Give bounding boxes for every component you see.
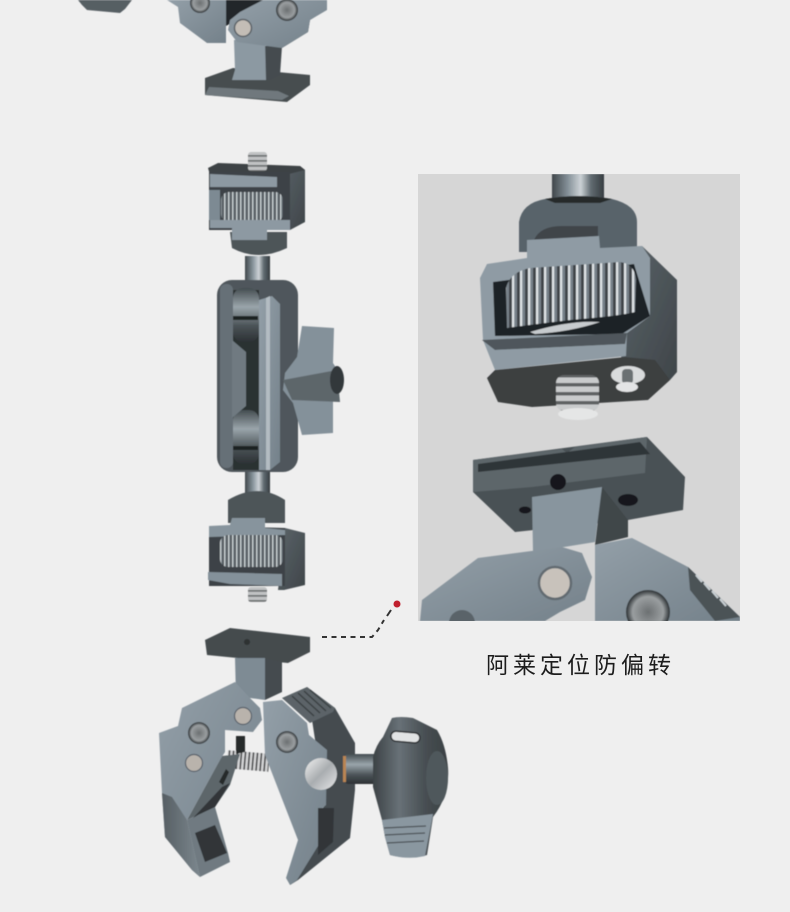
bottom knurled wheel: [220, 535, 283, 567]
top shoe body: [209, 172, 290, 230]
callout leader line: [322, 600, 400, 637]
clamp: [159, 628, 448, 885]
clamp screw: [226, 750, 270, 772]
knob stem: [345, 754, 379, 784]
right jaw front: [263, 700, 327, 885]
arm knob cap: [330, 366, 344, 394]
inset rod: [552, 174, 604, 202]
top collar: [230, 232, 287, 255]
clamp mount plate: [205, 628, 310, 663]
inset screw: [556, 375, 599, 420]
inset window: [493, 264, 650, 336]
left jaw slots: [219, 736, 245, 785]
bottom shoe body: [209, 526, 285, 586]
rivets: [186, 708, 252, 772]
arm knob wing: [283, 326, 344, 435]
bottom collar: [228, 491, 285, 523]
top fragment: rivet: [234, 20, 252, 36]
knob hole: [391, 731, 420, 743]
top lower bar: [210, 220, 290, 240]
inset collar: [519, 196, 637, 252]
inset left jaw: [420, 547, 592, 621]
inset shoe front: [480, 236, 650, 370]
left jaw: [159, 682, 262, 877]
inset pin: [611, 366, 645, 392]
knob grip: [382, 814, 433, 858]
upper stud: [245, 256, 270, 286]
top fragment: mount plate: [205, 68, 310, 102]
bottom shoe side: [278, 528, 305, 590]
knob cap: [426, 751, 448, 805]
inset lower mount plate: [473, 437, 685, 532]
inset right jaw: [595, 538, 740, 621]
top shoe side: [277, 166, 305, 230]
inset panel: [418, 174, 740, 636]
callout red dot: [394, 600, 400, 608]
silver disc: [305, 758, 337, 790]
left jaw lower shade: [162, 793, 200, 877]
top fragment: right jaw front: [228, 0, 327, 48]
arm body: [217, 280, 298, 472]
inset lower bar: [482, 333, 627, 350]
bottom screw: [248, 587, 267, 602]
plate holes: [519, 474, 638, 514]
ball joints and slot: [233, 290, 259, 470]
right jaw pad: [318, 808, 334, 855]
right jaw side: [290, 687, 355, 885]
top fragment: right jaw side: [275, 0, 327, 48]
top knurled wheel: [221, 192, 283, 222]
top fragment: left jaw: [167, 0, 226, 43]
inset rivet: [539, 567, 571, 599]
left jaw pads: [193, 783, 230, 862]
threaded holes: [188, 722, 298, 753]
right jaw top ridges: [282, 687, 335, 723]
top fragment: knob piece: [78, 0, 132, 13]
top fragment: neck: [265, 46, 282, 80]
left jaw lower face: [187, 807, 230, 877]
clamp neck: [265, 658, 282, 700]
top screw: [248, 152, 267, 171]
left jaw upper inner surface: [187, 754, 240, 820]
inset neck: [532, 487, 602, 552]
panel background: [418, 174, 740, 621]
inset holes: [448, 590, 670, 621]
inset wheel underside: [530, 322, 600, 334]
clamp knob: [373, 717, 448, 858]
lower stud: [245, 468, 270, 498]
inset neck side: [595, 487, 628, 545]
articulated arm: [208, 152, 344, 602]
caption: 阿莱定位防偏转: [486, 652, 675, 678]
inset shoe side: [620, 246, 677, 380]
top fragment: holes: [190, 0, 298, 21]
inset textured plate: [487, 357, 670, 407]
arm center bar: [259, 296, 280, 470]
inset knurled wheel: [506, 262, 636, 328]
top clamp fragment: [78, 0, 327, 102]
top shoe plate: [208, 163, 305, 177]
